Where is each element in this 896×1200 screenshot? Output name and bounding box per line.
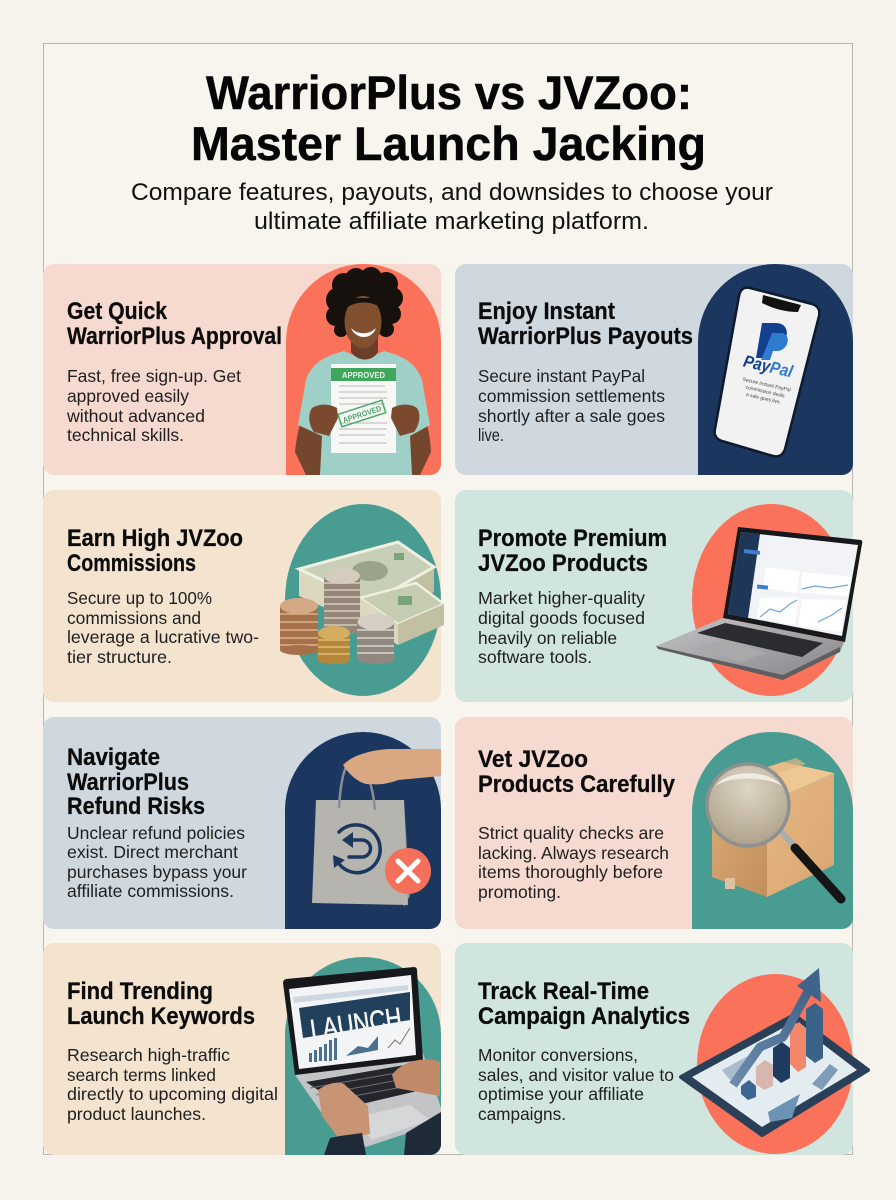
heading: WarriorPlus Payouts: [478, 323, 693, 350]
small phone caption: a sale goes live.: [745, 392, 782, 406]
body text: live.: [478, 425, 504, 445]
heading: [478, 525, 667, 577]
icon: tablet with 3D bars and growth arrow: [681, 968, 868, 1154]
body text: Research high-traffic: [67, 1045, 230, 1065]
icon: magnifier over cardboard box: [692, 732, 853, 929]
panel: Track Real-Time Campaign Analytics: [455, 943, 868, 1155]
heading: [478, 978, 690, 1030]
body text: promoting.: [478, 882, 561, 902]
panel: Find Trending Launch Keywords: [43, 943, 441, 1155]
body text: [67, 1045, 278, 1124]
icon: person holding approved form: APPROVED: [342, 404, 383, 425]
heading: Enjoy Instant: [478, 298, 615, 325]
small phone caption: commission deals: [745, 385, 786, 400]
heading: [67, 978, 255, 1030]
body text: [478, 823, 669, 902]
heading: [67, 744, 205, 820]
heading: [478, 298, 693, 350]
heading: Launch Keywords: [67, 1003, 255, 1030]
body text: search terms linked: [67, 1065, 216, 1085]
PayPal wordmark: PayPal: [742, 352, 796, 382]
title: Master Launch Jacking: [191, 117, 706, 170]
heading: WarriorPlus Approval: [67, 323, 282, 350]
body text: heavily on reliable: [478, 628, 617, 648]
body text: Market higher-quality: [478, 588, 645, 608]
body text: commissions and: [67, 608, 201, 628]
icon: person holding approved form: [286, 264, 441, 475]
body text: commission settlements: [478, 386, 665, 406]
body text: items thoroughly before: [478, 862, 663, 882]
title: WarriorPlus vs JVZoo:: [206, 66, 692, 119]
body text: without advanced: [66, 406, 205, 426]
body text: Strict quality checks are: [478, 823, 664, 843]
subtitle: ultimate affiliate marketing platform.: [254, 208, 649, 235]
body text: lacking. Always research: [478, 843, 669, 863]
LAUNCH label: LAUNCH: [308, 1002, 404, 1045]
icon: phone with PayPal: [698, 264, 853, 475]
heading: Earn High JVZoo: [67, 525, 243, 552]
heading: [478, 746, 676, 798]
body text: technical skills.: [67, 425, 184, 445]
heading: Vet JVZoo: [478, 746, 588, 773]
body text: leverage a lucrative two-: [67, 627, 259, 647]
heading: [67, 298, 282, 350]
icon: laptop with dashboard: [656, 504, 862, 696]
body text: tier structure.: [67, 647, 172, 667]
heading: Refund Risks: [67, 793, 205, 820]
body text: shortly after a sale goes: [478, 406, 665, 426]
body text: [478, 366, 665, 445]
body text: directly to upcoming digital: [67, 1084, 278, 1104]
heading: Navigate: [67, 744, 160, 771]
icon: laptop showing LAUNCH with typing hands: [283, 957, 441, 1155]
body text: purchases bypass your: [67, 862, 247, 882]
body text: product launches.: [67, 1104, 206, 1124]
panel: Earn High JVZoo Commissions: [43, 490, 444, 702]
heading: Get Quick: [67, 298, 168, 325]
icon: cash and coins: [280, 504, 444, 696]
body text: campaigns.: [478, 1104, 566, 1124]
body text: [478, 1045, 674, 1124]
title: [191, 66, 706, 170]
subtitle: Compare features, payouts, and downsides to choose your: [131, 179, 773, 206]
body text: Monitor conversions,: [478, 1045, 638, 1065]
heading: JVZoo Products: [478, 550, 648, 577]
body text: affiliate commissions.: [67, 881, 234, 901]
body text: approved easily: [67, 386, 189, 406]
body text: sales, and visitor value to: [478, 1065, 674, 1085]
body text: Secure up to 100%: [67, 588, 212, 608]
heading: Commissions: [67, 550, 196, 577]
body text: software tools.: [478, 647, 592, 667]
small phone caption: [739, 377, 791, 407]
heading: WarriorPlus: [67, 769, 189, 796]
body text: Fast, free sign-up. Get: [67, 366, 241, 386]
body text: digital goods focused: [478, 608, 645, 628]
body text: exist. Direct merchant: [67, 842, 238, 862]
body text: [478, 588, 645, 667]
panel: Vet JVZoo Products Carefully: [455, 717, 853, 929]
panel: Navigate WarriorPlus Refund Risks: [43, 717, 441, 929]
icon: shopping bag with refund and cross: [285, 732, 441, 929]
body text: Secure instant PayPal: [478, 366, 645, 386]
panel: Get Quick WarriorPlus Approval: [43, 264, 441, 475]
subtitle: [131, 179, 773, 235]
heading: Products Carefully: [478, 771, 676, 798]
body text: Unclear refund policies: [67, 823, 245, 843]
icon: person holding approved form: APPROVED: [342, 371, 385, 380]
body text: [67, 823, 247, 901]
panel: Enjoy Instant WarriorPlus Payouts: [455, 264, 853, 475]
small phone caption: Secure instant PayPal: [742, 377, 791, 394]
panel: Promote Premium JVZoo Products: [455, 490, 862, 702]
heading: Track Real-Time: [478, 978, 649, 1005]
heading: [67, 525, 243, 577]
body text: [67, 588, 259, 667]
body text: optimise your affiliate: [478, 1084, 644, 1104]
heading: Promote Premium: [478, 525, 667, 552]
heading: Find Trending: [67, 978, 213, 1005]
body text: [66, 366, 241, 445]
heading: Campaign Analytics: [478, 1003, 690, 1030]
